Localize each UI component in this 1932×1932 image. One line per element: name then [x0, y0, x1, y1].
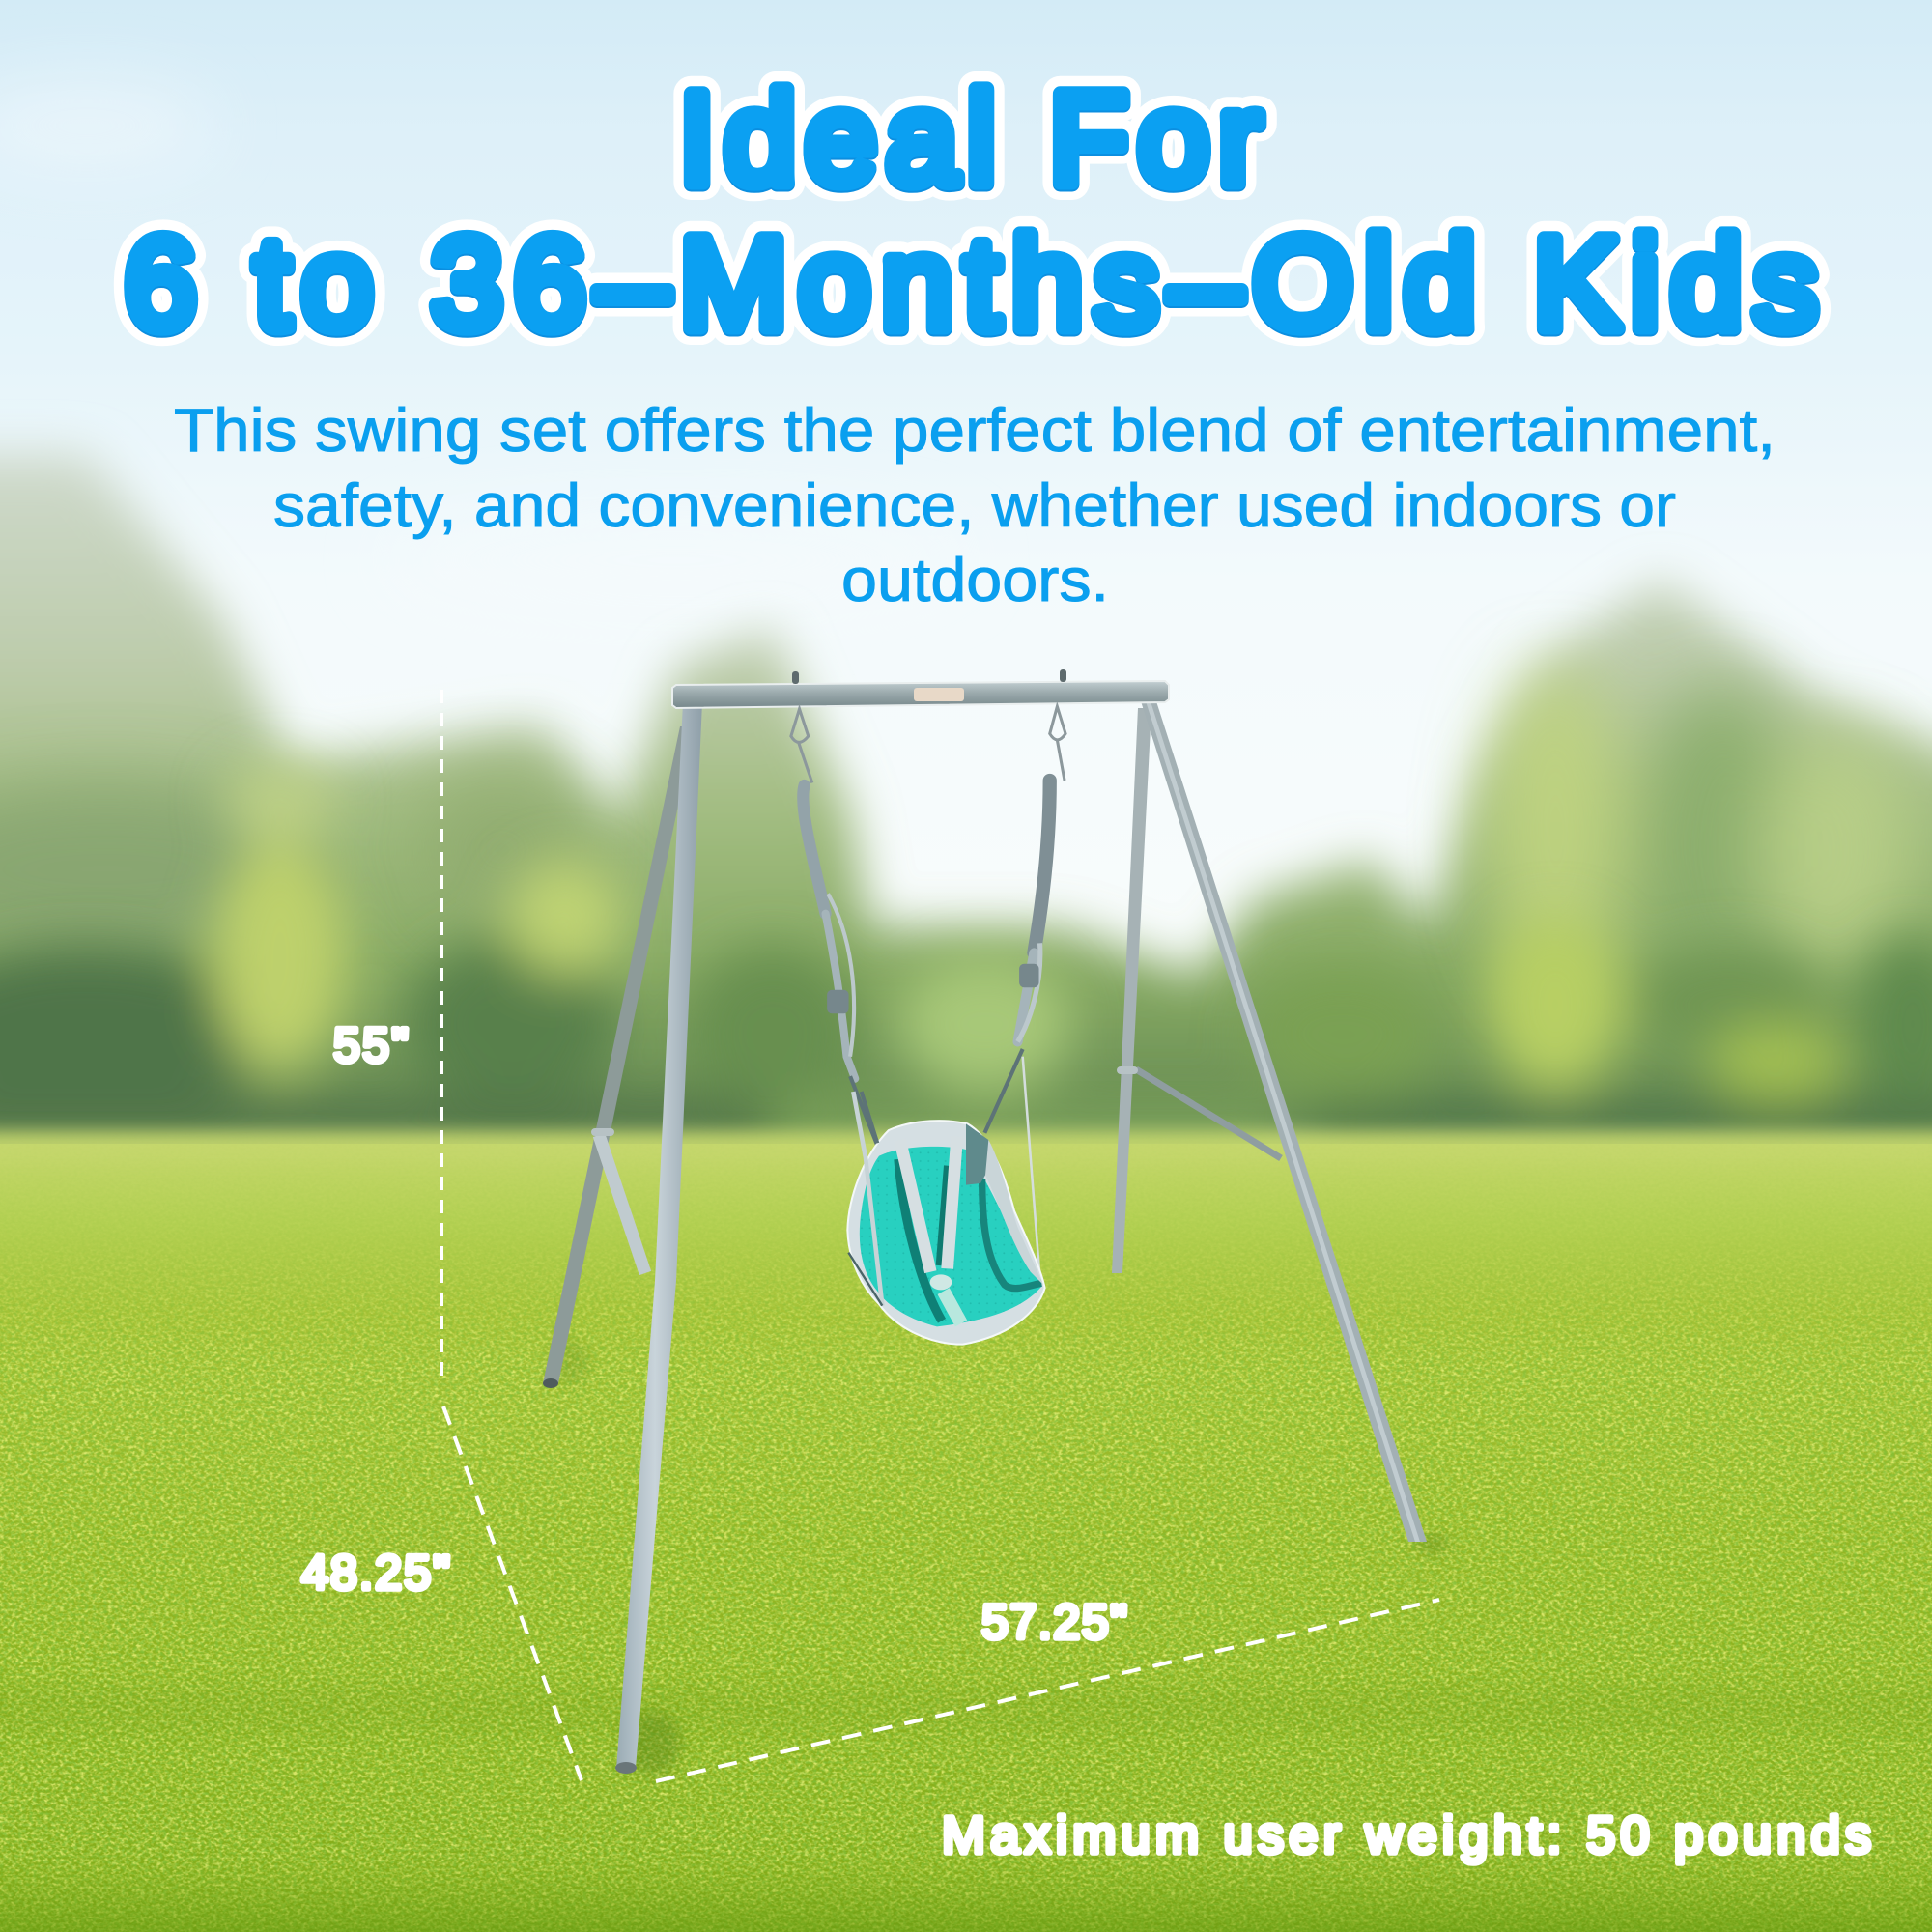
harness shadows — [898, 1159, 942, 1321]
logo sticker — [914, 688, 964, 701]
subtitle paragraph: safety, and convenience, whether used indoors or — [273, 472, 1676, 540]
subtitle paragraph: outdoors. — [841, 547, 1109, 614]
title line 1: Ideal For — [679, 67, 1262, 211]
front left leg — [616, 702, 702, 1768]
dimension line: width — [656, 1600, 1439, 1781]
label: depth: 48.25" — [301, 1546, 450, 1600]
right brace — [1136, 1069, 1281, 1158]
back right leg — [1112, 708, 1151, 1273]
front rope — [853, 1092, 882, 1306]
label: width: 57.25" — [981, 1595, 1127, 1649]
seat ropes — [850, 1076, 877, 1146]
seat — [847, 1092, 1045, 1345]
left brace — [599, 1135, 645, 1273]
title line 1: Ideal For — [679, 67, 1262, 211]
front right leg — [1141, 701, 1427, 1542]
swing set — [543, 669, 1427, 1774]
buckle — [930, 1274, 952, 1290]
dimension line: depth — [443, 1406, 582, 1780]
swing shadows on grass — [551, 1341, 1449, 1775]
top bolts — [792, 671, 799, 684]
seat shell — [847, 1121, 1045, 1345]
title line 1: Ideal For — [679, 69, 1262, 213]
brace clamps — [591, 1128, 614, 1136]
title line 2: 6 to 36–Months–Old Kids — [125, 213, 1818, 357]
title — [125, 67, 1818, 357]
strap knots — [827, 990, 849, 1013]
right strap — [1034, 781, 1050, 953]
hooks — [791, 706, 1065, 783]
subtitle paragraph — [174, 397, 1776, 614]
back left leg — [543, 726, 695, 1383]
left strap — [803, 785, 826, 914]
measurement labels — [301, 1018, 1127, 1649]
seat side shadow — [982, 1179, 1041, 1289]
sky background — [0, 0, 1932, 1159]
hangers and straps — [791, 706, 1065, 1278]
maximum weight note: Maximum user weight: 50 pounds — [942, 1806, 1871, 1864]
title line 2: 6 to 36–Months–Old Kids — [125, 212, 1818, 355]
harness straps — [900, 1137, 961, 1323]
top bar — [672, 681, 1169, 708]
blurred tree line — [0, 454, 1932, 1159]
label: height: 55" — [333, 1018, 409, 1072]
title line 2: 6 to 36–Months–Old Kids — [125, 212, 1818, 355]
grass field — [0, 1130, 1932, 1932]
clouds — [0, 87, 966, 609]
seat teal interior — [860, 1147, 1041, 1326]
left feet — [615, 1762, 637, 1774]
dimension line: height — [440, 690, 443, 1379]
subtitle paragraph: This swing set offers the perfect blend of entertainment, — [174, 397, 1776, 465]
